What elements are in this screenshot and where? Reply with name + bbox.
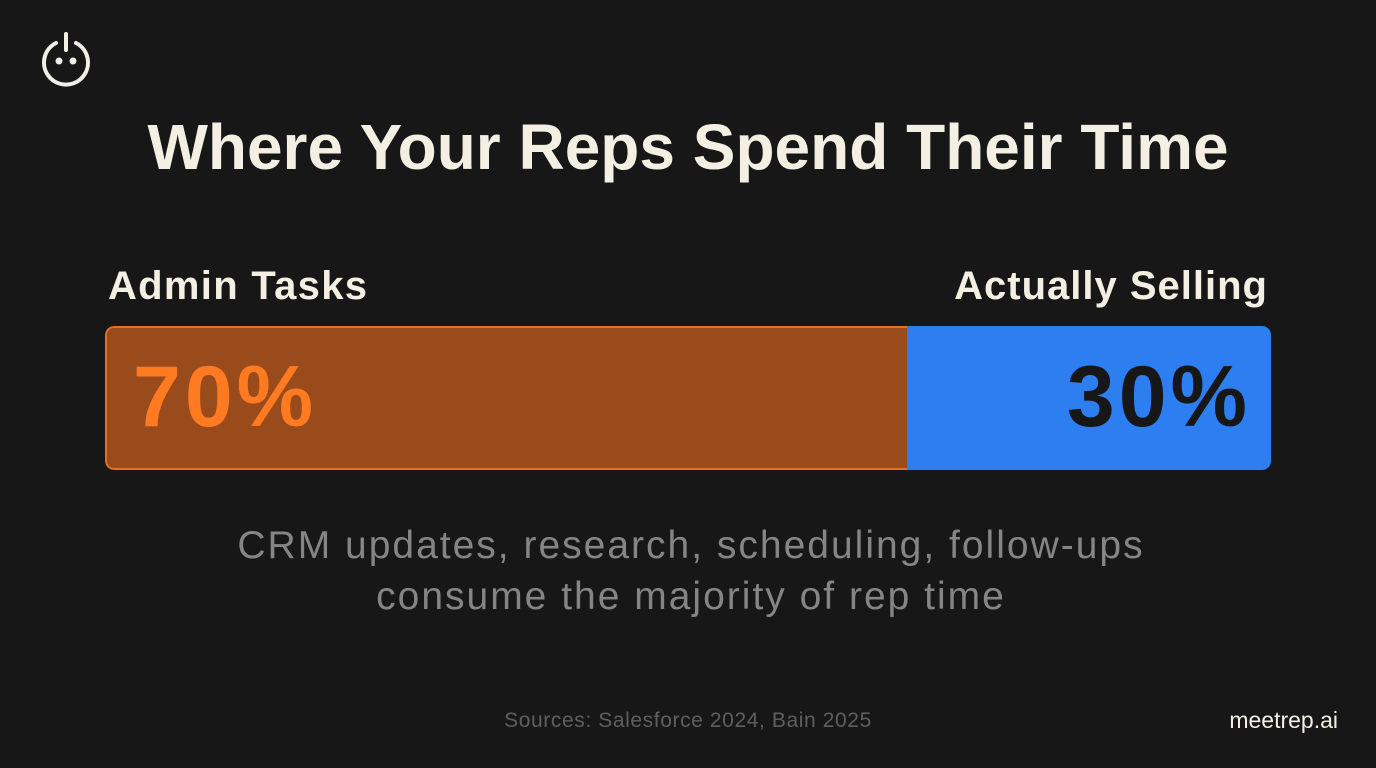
description text: consume the majority of rep time — [376, 575, 1006, 618]
sources: Sources: Salesforce 2024, Bain 2025 — [504, 709, 872, 732]
icon: power logo — [42, 32, 90, 87]
description text — [237, 524, 1145, 618]
description text: CRM updates, research, scheduling, follow-ups — [237, 524, 1145, 567]
title: Where Your Reps Spend Their Time — [147, 111, 1229, 183]
bar: admin 70%: 70% — [133, 349, 317, 445]
bar: admin 70% — [105, 326, 907, 470]
bar: selling 30% — [907, 326, 1271, 470]
label: actually selling: Actually Selling — [954, 264, 1268, 308]
label: admin tasks: Admin Tasks — [108, 264, 368, 308]
bar chart — [105, 326, 1271, 470]
brand: meetrep.ai — [1229, 707, 1338, 733]
bar: selling 30%: 30% — [1067, 349, 1251, 445]
